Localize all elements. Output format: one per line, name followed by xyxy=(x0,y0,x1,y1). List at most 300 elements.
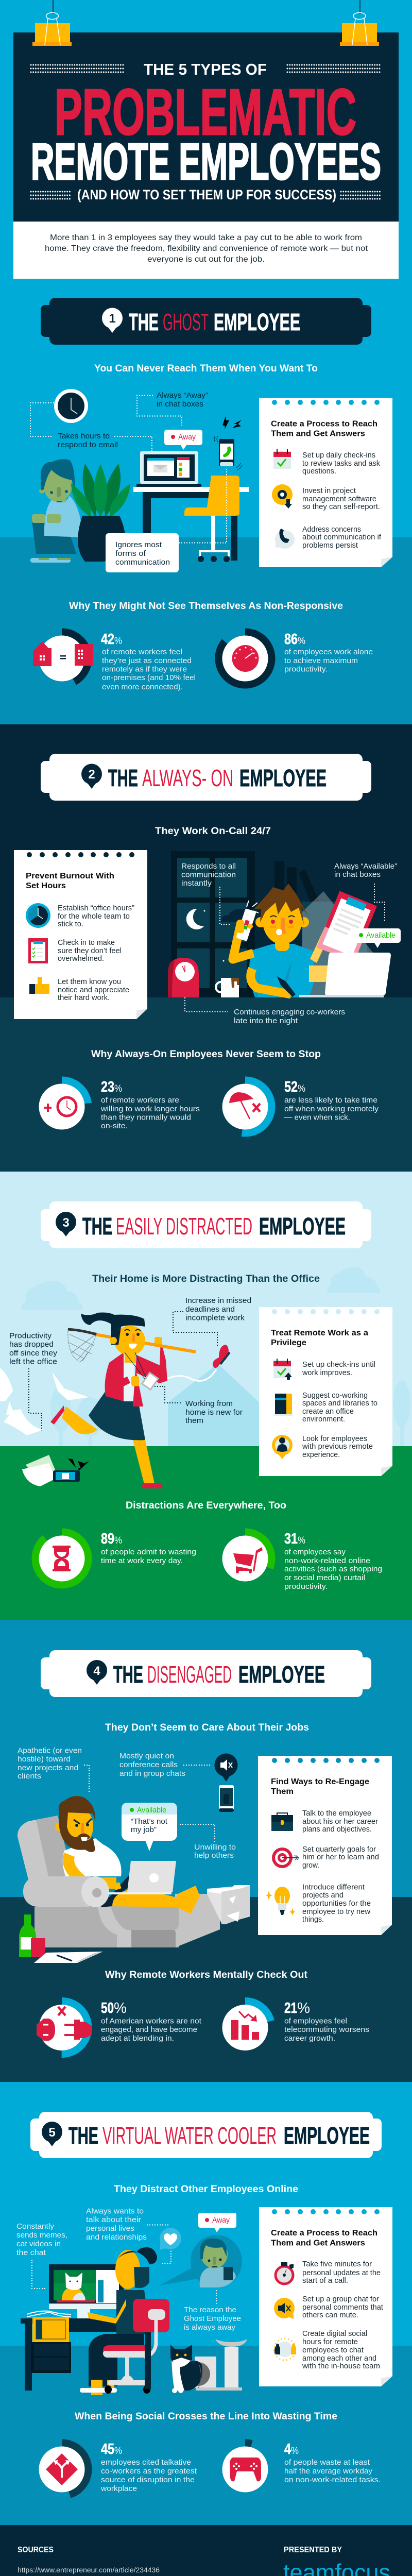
tip: appreciate: Let them know you xyxy=(58,978,121,986)
stat: 4 percent: on non-work-related tasks. xyxy=(284,2476,381,2484)
armchair arm xyxy=(23,1876,118,1907)
icon: butterfly net xyxy=(68,1329,96,1362)
stat: 4 percent: of people waste at least xyxy=(284,2458,370,2467)
stat: 42 percent: even more connected). xyxy=(102,683,183,691)
icon: available bubble xyxy=(350,928,401,948)
banner: section 3 easily distracted: EMPLOYEE xyxy=(259,1213,346,1240)
callout: always away xyxy=(157,391,208,409)
stat: 42 percent: of remote workers feel xyxy=(102,648,182,656)
callout: productivity dropped: Productivity xyxy=(9,1331,52,1341)
card title: Treat Remote Work as a xyxy=(271,1329,368,1337)
icon: number pin 1: 1 xyxy=(109,312,116,326)
callout: constantly sends memes: cat videos in xyxy=(16,2240,61,2248)
callout: always available: in chat boxes xyxy=(334,870,381,879)
panel: note card create a process xyxy=(259,398,392,567)
subtitle: (AND HOW TO SET THEM UP FOR SUCCESS) xyxy=(77,187,336,202)
chart: ring 42 percent xyxy=(35,632,89,685)
tip: daily check-ins: Set up daily check-ins xyxy=(302,451,375,460)
chart: ring 86 percent xyxy=(218,632,272,685)
character: social employee at computer xyxy=(80,2247,157,2395)
tip: group chat: personal comments that xyxy=(302,2303,383,2312)
banner: section 2 always-on: EMPLOYEE xyxy=(239,765,327,791)
stat: 50 percent xyxy=(35,2000,202,2054)
tip: office hours: stick to. xyxy=(58,920,83,928)
callout: working from home: Working from xyxy=(185,1399,233,1408)
icon: clipboard xyxy=(317,891,377,962)
icon: light bulb xyxy=(266,1887,295,1916)
heading: why remote workers check out: Why Remote Workers Mentally Check Out xyxy=(105,1970,308,1980)
callout: the reason: Ghost Employee xyxy=(184,2314,241,2323)
callout: apathetic: new projects and xyxy=(18,1764,78,1772)
tip: five minutes: start of a call. xyxy=(302,2277,348,2285)
character: ghost employee xyxy=(30,459,82,563)
heading: they work on-call: They Work On-Call 24/7 xyxy=(155,826,271,837)
icon: number pin 3: 3 xyxy=(62,1216,70,1230)
banner: section 2 always-on xyxy=(41,754,371,801)
icon: game controller xyxy=(230,2458,261,2481)
icon: person pin xyxy=(272,1435,293,1459)
icon: phone xyxy=(219,1785,234,1812)
stat: 50 percent: of American workers are not xyxy=(101,2016,202,2026)
tip: digital social hours: Create digital social xyxy=(302,2330,367,2338)
stat: 45 percent: source of disruption in the xyxy=(101,2476,195,2484)
tip: digital social hours: among each other and xyxy=(302,2354,376,2363)
tip: quarterly goals: grow. xyxy=(302,1861,319,1870)
banner: section 1 the ghost employee: GHOST xyxy=(163,309,209,335)
illustration: distracted employee chasing butterfly xyxy=(0,1296,410,1488)
icon: laptop grey xyxy=(108,1861,176,1894)
stat: 52 percent: % xyxy=(298,1083,305,1094)
icon: available chat bubble xyxy=(122,1803,177,1851)
tip: introduce projects: things. xyxy=(302,1916,324,1924)
icon: beach umbrella cancelled xyxy=(229,1092,260,1119)
tip: co-working xyxy=(302,1392,377,1423)
character: ghost employee on phone xyxy=(160,2235,242,2287)
icon: coffee mug xyxy=(216,978,239,997)
callout: always wants to talk xyxy=(86,2207,147,2242)
callout: apathetic xyxy=(18,1747,82,1781)
panel: presented by xyxy=(283,2546,390,2576)
panel: presented by: PRESENTED BY xyxy=(284,2546,342,2554)
callout: mostly quiet: Mostly quiet on xyxy=(119,1752,174,1760)
tip: office hours: for the whole team to xyxy=(58,912,130,921)
stat: 4 percent: half the average workday xyxy=(284,2467,373,2476)
chart: ring 52 percent xyxy=(218,1080,272,1133)
tip: group chat: Set up a group chat for xyxy=(302,2295,379,2303)
icon: number pin 2 xyxy=(81,764,102,789)
tip: co-working: environment. xyxy=(302,1415,345,1423)
icon: calendar with arrow xyxy=(273,1359,292,1380)
icon: stopwatch xyxy=(276,2262,294,2284)
icon: away bubble xyxy=(198,2213,236,2232)
heading: why always-on: Why Always-On Employees Never Seem to Stop xyxy=(91,1049,321,1060)
desk xyxy=(133,487,249,561)
card title: Create a Process to Reach xyxy=(271,419,377,429)
banner: section 4 disengaged xyxy=(41,1650,371,1697)
chart: ring 21 percent xyxy=(218,2001,272,2054)
character: distracted employee xyxy=(50,1313,196,1488)
tip: talk career xyxy=(302,1809,378,1834)
tip: daily check-ins: to review tasks and ask xyxy=(302,460,381,468)
icon: road fork diamond xyxy=(46,2453,78,2485)
tip: quarterly goals: Set quarterly goals for xyxy=(302,1845,376,1854)
heading: the 5 types of: THE 5 TYPES OF xyxy=(144,60,267,78)
icon: phone xyxy=(214,436,242,470)
tip: digital social hours: with the in-house team xyxy=(302,2362,380,2370)
stat: 42 percent: they’re just as connected xyxy=(102,656,192,665)
character: disengaged employee xyxy=(55,1796,200,1914)
icon: speedometer xyxy=(232,645,259,672)
banner: section 3 easily distracted xyxy=(41,1201,371,1248)
icon: unplugged xyxy=(37,2007,92,2041)
icon: calendar check xyxy=(273,449,291,469)
icon: people around table xyxy=(274,2338,296,2360)
banner: section 1 the ghost employee xyxy=(41,298,371,345)
tip: talk career: about his or her career xyxy=(302,1818,378,1826)
callout: productivity dropped: off since they xyxy=(9,1349,58,1358)
callout: takes hours: Takes hours to xyxy=(58,432,110,440)
stat: 52 percent: off when working remotely xyxy=(284,1105,379,1113)
heading: distractions are everywhere: Distractions Are Everywhere, Too xyxy=(126,1500,286,1511)
panel: note card find ways to re-engage xyxy=(258,1756,392,1935)
tip: check-ins: work improves. xyxy=(302,1369,352,1377)
stat: 23 percent: than they normally would xyxy=(101,1113,191,1122)
icon: number pin 4: 4 xyxy=(93,1664,100,1678)
chart: ring 45 percent xyxy=(35,2443,89,2496)
icon: binder clip left xyxy=(32,0,72,46)
card title: Them and Get Answers xyxy=(271,430,365,438)
stat: 86 percent: to achieve maximum xyxy=(284,656,358,665)
stat: 23 percent: on-site. xyxy=(101,1122,128,1130)
callout: working from home xyxy=(185,1399,243,1425)
callout: always wants to talk: personal lives xyxy=(86,2224,134,2233)
office chair xyxy=(103,2299,169,2394)
tip: check in: Check in to make xyxy=(58,939,115,947)
panel: intro text: home. They crave the freedom, flexibility and convenience of remote work — but not xyxy=(45,244,368,253)
stat: 31 percent: productivity. xyxy=(284,1582,328,1591)
banner: section 4 disengaged: EMPLOYEE xyxy=(238,1661,325,1688)
tip: check in xyxy=(58,939,122,963)
callout: unwilling: Unwilling to xyxy=(194,1843,236,1852)
stat: 50 percent: % xyxy=(114,2000,127,2016)
banner: section 5 virtual water cooler xyxy=(30,2112,382,2158)
callout: ignores communication xyxy=(106,533,179,572)
stat: 23 percent: of remote workers are xyxy=(101,1096,179,1105)
card title: Them and Get Answers xyxy=(271,2239,365,2247)
stat: 45 percent: co-workers as the greatest xyxy=(101,2467,197,2476)
cat tree xyxy=(186,2339,247,2391)
callout: always wants to talk: talk about their xyxy=(86,2215,141,2224)
tip: appreciate xyxy=(58,978,129,1002)
icon: declining bars xyxy=(231,2011,259,2040)
banner: section 4 disengaged: DISENGAGED xyxy=(147,1661,232,1688)
stat: 42 percent: on-premises (and 10% feel xyxy=(102,673,196,682)
icon: hourglass xyxy=(53,1546,71,1571)
banner: section 5 virtual water cooler: EMPLOYEE xyxy=(284,2122,370,2149)
tip: check in: overwhelmed. xyxy=(58,955,104,963)
callout: the reason: is always away xyxy=(184,2323,235,2332)
tip: project software: Invest in project xyxy=(302,487,356,495)
tip: daily check-ins xyxy=(302,451,381,476)
banner: section 2 always-on: ALWAYS- ON xyxy=(142,765,233,791)
stat: 89 percent: of people admit to wasting xyxy=(101,1548,196,1556)
icon: number pin 5 xyxy=(42,2122,62,2146)
icon: plus clock xyxy=(44,1097,76,1116)
callout: constantly sends memes: the chat xyxy=(16,2248,46,2257)
cat xyxy=(170,2345,202,2393)
heading: you can never reach them: You Can Never Reach Them When You Want To xyxy=(94,363,318,374)
callout: always wants to talk: Always wants to xyxy=(86,2207,144,2215)
tip: check-ins xyxy=(302,1361,375,1377)
tip: digital social hours xyxy=(302,2330,380,2370)
tip: address concerns: problems persist xyxy=(302,541,358,550)
icon: butterfly xyxy=(213,1345,230,1368)
stat: 42 percent xyxy=(33,631,196,691)
tip: introduce projects xyxy=(302,1884,371,1924)
heading: they distract other employees: They Distract Other Employees Online xyxy=(114,2184,298,2195)
icon: mute bubble xyxy=(214,1754,238,1782)
stat: 31 percent: of employees say xyxy=(284,1548,346,1556)
clouds xyxy=(22,1267,380,1310)
callout: responds xyxy=(181,862,236,888)
tip: digital social hours: employees to chat xyxy=(302,2346,364,2354)
stat: 23 percent xyxy=(35,1079,200,1133)
tip: co-working: create an office xyxy=(302,1408,354,1416)
stat: 21 percent: % xyxy=(297,2000,310,2016)
callout: mostly quiet: conference calls xyxy=(119,1760,178,1769)
icon: available chat bubble: Available xyxy=(137,1806,166,1815)
icon: paper and pen xyxy=(34,1952,103,1963)
icon: away bubble: Away xyxy=(178,433,196,442)
stat: 50 percent: adept at blending in. xyxy=(101,2034,174,2043)
callout: continues engaging: Continues engaging co-workers xyxy=(234,1008,345,1016)
stat: 52 percent xyxy=(218,1079,379,1133)
icon: shopping cart xyxy=(233,1547,263,1573)
stat: 86 percent: 86 xyxy=(284,631,298,648)
panel: intro text xyxy=(13,222,399,279)
panel: sources: https://www.entrepreneur.com/article/234436 xyxy=(18,2566,160,2574)
stat: 42 percent: 42 xyxy=(101,631,114,648)
stat: 86 percent: productivity. xyxy=(284,665,328,674)
callout: increase missed deadlines: Increase in missed xyxy=(185,1296,251,1305)
tip: five minutes xyxy=(302,2260,381,2285)
icon: red clock xyxy=(168,958,199,997)
tip: introduce projects: employee to try new xyxy=(302,1908,371,1916)
icon: lightning bolts xyxy=(222,416,242,429)
callout: ignores communication: Ignores most xyxy=(115,540,162,549)
window xyxy=(171,851,255,997)
banner: section 3 easily distracted: EASILY DISTRACTED xyxy=(116,1213,252,1240)
tip: group chat xyxy=(302,2295,383,2319)
illustration: virtual water cooler employee xyxy=(16,2207,247,2395)
tip: previous experience: with previous remote xyxy=(302,1443,373,1451)
banner: section 3 easily distracted: THE xyxy=(82,1213,112,1240)
icon: mute bubble yellow xyxy=(274,2298,295,2319)
panel: sources xyxy=(18,2546,392,2576)
callout: increase missed deadlines: incomplete work xyxy=(185,1314,245,1322)
books and lamp xyxy=(274,861,325,929)
stat: 86 percent: of employees work alone xyxy=(284,648,373,656)
icon: laptop white xyxy=(299,953,391,997)
tip: project software: management software xyxy=(302,495,376,503)
callout: productivity dropped xyxy=(9,1331,58,1366)
callout: working from home: home is new for xyxy=(185,1408,243,1417)
stat: 52 percent: — even when sick. xyxy=(284,1113,350,1122)
tip: quarterly goals: him or her to learn and xyxy=(302,1853,379,1861)
tip: address concerns xyxy=(302,526,382,550)
background trees and hill xyxy=(50,1381,410,1446)
card title: Set Hours xyxy=(26,882,66,890)
panel: note card treat remote work xyxy=(259,1307,392,1476)
heading: they don't seem to care: They Don’t Seem to Care About Their Jobs xyxy=(105,1722,309,1733)
panel: note card prevent burnout xyxy=(14,850,147,1019)
tip: introduce projects: opportunities for the xyxy=(302,1900,371,1908)
icon: available chat bubble: my job” xyxy=(131,1825,157,1834)
callout: increase missed deadlines xyxy=(185,1296,251,1322)
callout: continues engaging: late into the night xyxy=(234,1016,298,1025)
callout: working from home: them xyxy=(185,1416,203,1425)
callout: productivity dropped: has dropped xyxy=(9,1340,54,1349)
icon: briefcase xyxy=(271,1813,293,1831)
icon: laptop xyxy=(136,451,201,487)
tip: project software: so they can self-report. xyxy=(302,503,380,511)
stat: 50 percent: 50 xyxy=(101,2000,114,2016)
stat: 23 percent: willing to work longer hours xyxy=(100,1105,200,1113)
heading: when being social: When Being Social Crosses the Line Into Wasting Time xyxy=(75,2411,337,2422)
tip: daily check-ins: questions. xyxy=(302,467,336,476)
plant xyxy=(71,464,130,562)
heading: why they might not: Why They Might Not See Themselves As Non-Responsive xyxy=(69,601,343,612)
stat: 31 percent: or social media) curtail xyxy=(284,1573,365,1582)
chart: ring 50 percent xyxy=(35,2001,89,2054)
flying papers xyxy=(0,1368,89,1435)
callout: always available: Always “Available” xyxy=(334,862,397,871)
tip: five minutes: Take five minutes for xyxy=(302,2260,372,2268)
callout: unwilling: help others xyxy=(194,1851,234,1860)
callout: constantly sends memes: sends memes, xyxy=(16,2231,67,2240)
chart: ring 4 percent xyxy=(218,2443,272,2496)
stat: 31 percent: non-work-related online xyxy=(284,1556,370,1565)
card title: Prevent Burnout With xyxy=(26,872,114,880)
stat: 4 percent: 4 xyxy=(284,2441,291,2458)
callout: mostly quiet: and in group chats xyxy=(119,1769,185,1778)
icon: number pin 4 xyxy=(87,1660,107,1685)
stat: 89 percent: 89 xyxy=(101,1531,114,1547)
callout: responds: instantly xyxy=(181,879,212,888)
icon: thumbs up xyxy=(29,977,49,994)
card title: Create a Process to Reach xyxy=(271,2229,377,2238)
card title: Find Ways to Re-Engage xyxy=(271,1777,369,1786)
banner: section 5 virtual water cooler: VIRTUAL WATER COOLER xyxy=(102,2122,277,2149)
banner: section 5 virtual water cooler: THE xyxy=(68,2122,98,2149)
callout: the reason xyxy=(184,2306,241,2332)
icon: heart bubble xyxy=(160,2228,181,2250)
icon: number pin 5: 5 xyxy=(48,2126,56,2140)
tip: check in: sure they don’t feel xyxy=(58,947,122,955)
stat: 31 percent: % xyxy=(298,1535,305,1546)
light cone xyxy=(302,891,373,997)
character: always-on employee xyxy=(233,884,334,997)
card title: Privilege xyxy=(271,1338,306,1347)
tip: previous experience: experience. xyxy=(302,1451,340,1459)
callout: increase missed deadlines: deadlines and xyxy=(185,1305,235,1314)
chart: ring 23 percent xyxy=(35,1080,89,1133)
tip: check-ins: Set up check-ins until xyxy=(302,1361,375,1369)
card title xyxy=(271,419,377,438)
tip: office hours xyxy=(58,904,134,928)
stat: 45 percent: 45 xyxy=(101,2441,114,2458)
tip: office hours: Establish “office hours” xyxy=(58,904,134,912)
tip: group chat: others can mute. xyxy=(302,2311,358,2319)
stat: 86 percent: % xyxy=(298,636,305,647)
tip: digital social hours: hours for remote xyxy=(302,2338,358,2346)
stat: 42 percent: % xyxy=(114,636,122,647)
stat: 45 percent xyxy=(35,2441,197,2496)
icon: number pin 1 xyxy=(102,308,123,333)
banner: section 1 the ghost employee: THE xyxy=(129,309,159,335)
stat: 31 percent: activities (such as shopping xyxy=(284,1565,382,1573)
icon: away bubble: Away xyxy=(212,2216,230,2225)
stat: 21 percent xyxy=(218,2000,369,2054)
icon: available chat bubble: “That’s not xyxy=(131,1817,168,1826)
callout: always available xyxy=(334,862,397,879)
monitor with cat video xyxy=(49,2264,124,2318)
banner: section 1 the ghost employee: EMPLOYEE xyxy=(214,309,300,335)
panel: intro text: More than 1 in 3 employees say they would take a pay cut to be able to work from xyxy=(50,233,362,242)
illustration: disengaged employee on armchair xyxy=(18,1747,250,1963)
stat: 21 percent: telecommuting worsens xyxy=(284,2025,369,2034)
tip: address concerns: about communication if xyxy=(302,533,382,541)
callout: takes hours: respond to email xyxy=(58,440,118,449)
card title: Them xyxy=(271,1787,294,1796)
stat: 21 percent: 21 xyxy=(284,2000,297,2016)
icon: bookshelf xyxy=(274,1394,293,1416)
icon: binder clip right xyxy=(340,0,379,46)
heading: their home is more distracting: Their Home is More Distracting Than the Office xyxy=(92,1274,320,1284)
tip: appreciate: notice and appreciate xyxy=(58,986,129,994)
stat: 52 percent: 52 xyxy=(284,1079,298,1095)
tip: appreciate: their hard work. xyxy=(58,994,110,1002)
stat: 45 percent: employees cited talkative xyxy=(101,2458,191,2467)
stat: 89 percent: time at work every day. xyxy=(101,1556,183,1565)
tip: talk career: Talk to the employee xyxy=(302,1809,371,1818)
illustration: ghost employee at desk xyxy=(30,389,249,572)
callout: constantly sends memes xyxy=(16,2222,67,2257)
tip: co-working: Suggest co-working xyxy=(302,1392,368,1400)
icon: away bubble xyxy=(164,430,202,450)
tip: previous experience xyxy=(302,1435,373,1459)
icon: blue clock xyxy=(26,903,50,928)
panel: title header xyxy=(13,0,399,222)
stat: 89 percent: % xyxy=(114,1535,122,1546)
icon: number pin 3 xyxy=(56,1212,76,1236)
callout: unwilling xyxy=(194,1843,236,1860)
icon: home equals office xyxy=(33,641,93,666)
banner: section 4 disengaged: THE xyxy=(113,1661,143,1688)
panel: sources: SOURCES xyxy=(18,2546,54,2554)
callout: mostly quiet xyxy=(119,1752,185,1778)
callout: takes hours xyxy=(58,432,118,449)
card title xyxy=(271,1777,369,1796)
tip: talk career: plans and objectives. xyxy=(302,1825,372,1834)
panel: note card create a process second xyxy=(259,2207,392,2386)
callout: ignores communication: forms of xyxy=(115,549,146,558)
stat: 4 percent xyxy=(218,2441,381,2496)
tip: project software xyxy=(302,487,380,511)
icon: dropped phone and papers xyxy=(22,1455,89,1486)
stat: 31 percent: 31 xyxy=(284,1531,298,1547)
callout: always away: in chat boxes xyxy=(157,400,203,409)
